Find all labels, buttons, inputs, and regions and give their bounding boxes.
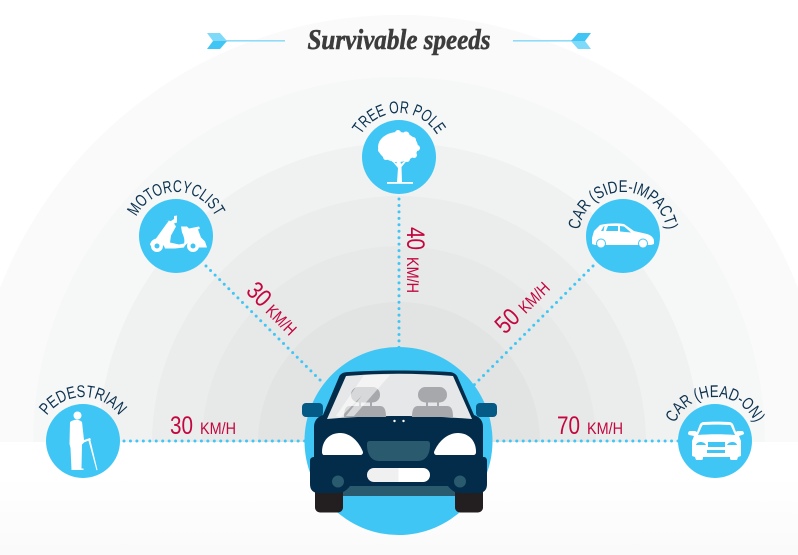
icon: front car — [688, 422, 744, 460]
main car in blue circle — [302, 347, 497, 535]
speed label: car side-impact 50 km/h: 50 — [489, 303, 526, 339]
right arrow — [513, 33, 591, 49]
heading text: Survivable speeds — [308, 24, 490, 56]
speed label: tree 40 km/h — [401, 227, 429, 293]
label: pedestrian: PEDESTRIAN — [38, 385, 128, 415]
speed label: motorcyclist 30 km/h: 30 — [241, 276, 277, 313]
speed label: tree 40 km/h: KM/H — [403, 257, 422, 293]
speed label: car head-on 70 km/h: KM/H — [587, 419, 623, 438]
headlights — [322, 433, 476, 455]
speed label: pedestrian 30 km/h: KM/H — [200, 419, 236, 438]
node: tree or pole — [352, 101, 446, 194]
speed label: motorcyclist 30 km/h: KM/H — [262, 301, 300, 339]
windshield — [327, 374, 472, 419]
hood dots — [393, 420, 405, 422]
node: pedestrian — [38, 385, 128, 478]
node: car head-on — [666, 385, 765, 478]
left arrow — [207, 33, 285, 49]
speed label: tree 40 km/h: 40 — [401, 227, 429, 250]
speed label: car side-impact 50 km/h: KM/H — [515, 278, 554, 317]
dotted connector lines — [124, 199, 678, 441]
number plate — [367, 468, 430, 482]
fog lights — [332, 476, 466, 488]
label: motorcyclist: MOTORCYCLIST — [126, 180, 226, 216]
speed label: car side-impact 50 km/h — [489, 273, 555, 339]
speed label: car head-on 70 km/h: 70 — [557, 412, 580, 440]
car body — [310, 370, 487, 493]
speed label: pedestrian 30 km/h: 30 — [170, 412, 193, 440]
icon: mirrors — [302, 403, 497, 417]
title — [207, 24, 591, 56]
label: car (side-impact): CAR (SIDE-IMPACT) — [568, 180, 678, 228]
speed label: car head-on 70 km/h — [557, 412, 623, 440]
node: motorcyclist — [126, 180, 226, 273]
seats — [344, 387, 453, 417]
label: tree or pole: TREE OR POLE — [352, 101, 446, 134]
speed label: pedestrian 30 km/h — [170, 412, 236, 440]
icon: wheels — [315, 480, 483, 512]
windshield reflections — [336, 375, 390, 417]
icon: tree — [378, 130, 420, 184]
icon: elderly pedestrian — [70, 412, 98, 470]
label: car (head-on): CAR (HEAD-ON) — [666, 385, 765, 422]
grille — [367, 441, 430, 461]
speed label: motorcyclist 30 km/h — [241, 276, 305, 341]
node: car side-impact — [568, 180, 678, 273]
lower grille — [343, 480, 455, 496]
icon: side car — [592, 223, 654, 248]
icon: scooter — [150, 216, 207, 252]
